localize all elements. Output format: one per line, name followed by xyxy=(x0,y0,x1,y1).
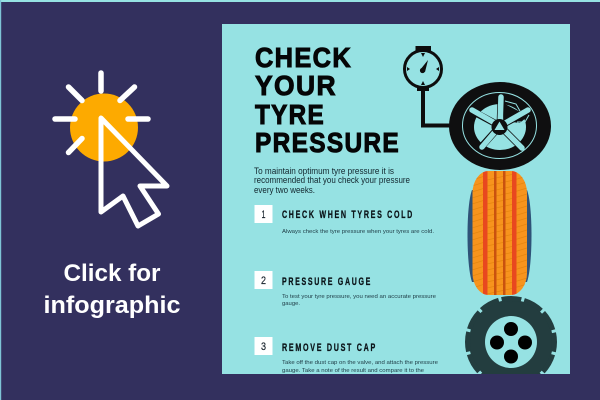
step 3 body: Take off the dust cap on the valve, and attach the pressure xyxy=(282,360,438,366)
step 3 heading: REMOVE DUST CAP xyxy=(282,342,377,354)
step 2 body: To test your tyre pressure, you need an accurate pressure xyxy=(282,294,436,300)
icon: click cursor with sun xyxy=(55,73,167,226)
intro text: every two weeks. xyxy=(254,185,315,195)
step 2 number: 2 xyxy=(261,275,266,287)
icon: wheel xyxy=(449,82,551,170)
step 3 number: 3 xyxy=(261,341,266,353)
caption: click for infographic: Click for xyxy=(64,260,161,287)
icon: pressure gauge xyxy=(404,46,455,126)
step 1 body: Always check the tyre pressure when your tyres are cold. xyxy=(282,229,434,235)
icon: cursor arrow xyxy=(101,118,167,226)
gauge dial xyxy=(404,50,442,88)
icon: orange circle xyxy=(70,94,138,162)
step 1 xyxy=(254,205,434,235)
intro text: To maintain optimum tyre pressure it is xyxy=(254,166,394,176)
intro text xyxy=(254,166,410,195)
step 2 number box xyxy=(254,271,272,289)
step 3 xyxy=(254,337,438,374)
title: TYRE xyxy=(255,99,325,130)
step 2 body xyxy=(282,294,436,307)
caption: click for infographic: infographic xyxy=(44,292,180,319)
title: YOUR xyxy=(255,70,337,101)
step 1 number box xyxy=(254,205,272,223)
intro text: recommended that you check your pressure xyxy=(254,175,410,185)
icon: orange tyre tread xyxy=(468,171,532,295)
wheel spokes xyxy=(472,97,528,148)
step 2 xyxy=(254,271,436,307)
panel: infographic xyxy=(222,24,570,386)
title: CHECK xyxy=(255,42,352,73)
caption: click for infographic xyxy=(44,260,180,319)
title xyxy=(255,42,400,158)
icon: bottom tyre xyxy=(468,298,554,386)
step 3 body: gauge. Take a note of the result and compare it to the xyxy=(282,368,424,374)
gauge hose xyxy=(423,88,455,126)
step 3 number box xyxy=(254,337,272,355)
step 2 body: gauge. xyxy=(282,301,300,307)
step 3 body xyxy=(282,360,438,374)
title: PRESSURE xyxy=(255,127,400,158)
step 1 number: 1 xyxy=(262,209,266,221)
icon: click rays xyxy=(55,73,148,152)
step 2 heading: PRESSURE GAUGE xyxy=(282,276,372,288)
step 1 heading: CHECK WHEN TYRES COLD xyxy=(282,209,414,221)
